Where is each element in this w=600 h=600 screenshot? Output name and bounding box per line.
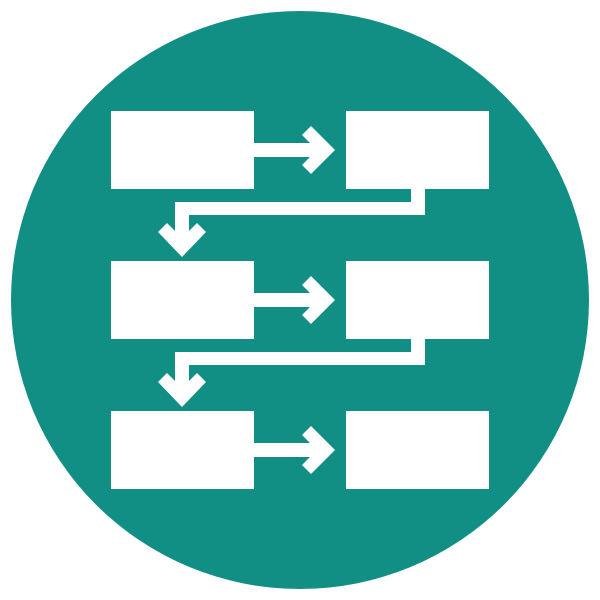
arrow: row 1 right down to row 2 left: [158, 189, 425, 257]
arrow: row 2 left to right: [254, 276, 335, 324]
row 1 right box: [346, 111, 489, 189]
arrow: row 1 left to right: [254, 126, 335, 174]
arrow: row 3 left to right: [254, 426, 335, 474]
arrow: row 2 right down to row 3 left: [158, 339, 425, 407]
row 2 left box: [111, 261, 254, 339]
row 3 left box: [111, 411, 254, 489]
row 2 right box: [346, 261, 489, 339]
row 3 right box: [346, 411, 489, 489]
row 1 left box: [111, 111, 254, 189]
